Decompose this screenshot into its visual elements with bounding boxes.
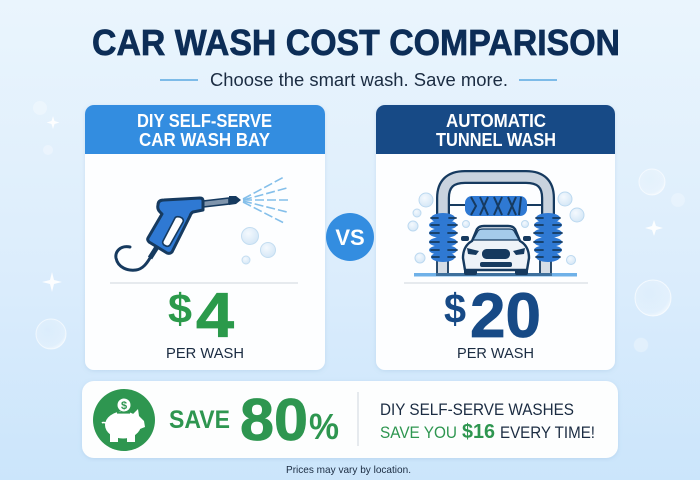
wash bubbles [408, 192, 584, 264]
savings message: EVERY TIME! [500, 424, 595, 442]
background bubbles left [33, 101, 66, 349]
save percent [240, 387, 339, 453]
spray [243, 177, 289, 223]
price: $20: 20 [470, 281, 541, 351]
price: $4: 4 [196, 281, 234, 351]
panel header: automatic: AUTOMATIC [446, 111, 546, 131]
panel header: automatic: TUNNEL WASH [436, 130, 556, 150]
label: per wash: PER WASH [166, 346, 244, 362]
price: $4: $ [168, 285, 192, 332]
panel header: DIY: DIY SELF-SERVE [137, 111, 272, 131]
vs badge: VS [335, 225, 365, 250]
panel: DIY self-serve [85, 105, 325, 370]
bubbles [242, 228, 276, 264]
label: per wash: PER WASH [457, 346, 534, 362]
savings message [380, 401, 595, 443]
savings message: DIY SELF-SERVE WASHES [380, 401, 574, 419]
save percent: % [309, 406, 339, 447]
panel header: automatic [376, 105, 615, 154]
panel header: DIY [85, 105, 325, 154]
vs badge [326, 213, 374, 261]
save label: SAVE [169, 406, 230, 434]
price: $20: $ [444, 285, 466, 332]
background bubbles right [634, 169, 685, 352]
icon: pressure washer gun [116, 196, 241, 270]
savings banner [82, 381, 618, 458]
footnote: Prices may vary by location. [286, 464, 411, 476]
savings message: $16 [462, 421, 495, 443]
savings message: SAVE YOU [380, 424, 457, 442]
panel: automatic tunnel wash [376, 105, 615, 370]
icon: piggy bank [93, 389, 155, 451]
subtitle: Choose the smart wash. Save more. [210, 70, 508, 90]
save percent: 80 [240, 387, 308, 453]
panel header: DIY: CAR WASH BAY [139, 130, 270, 150]
title: CAR WASH COST COMPARISON [92, 22, 620, 63]
icon: piggy bank: $ [121, 400, 127, 412]
icon: tunnel wash with car [414, 177, 577, 276]
price: $4 [168, 281, 234, 351]
